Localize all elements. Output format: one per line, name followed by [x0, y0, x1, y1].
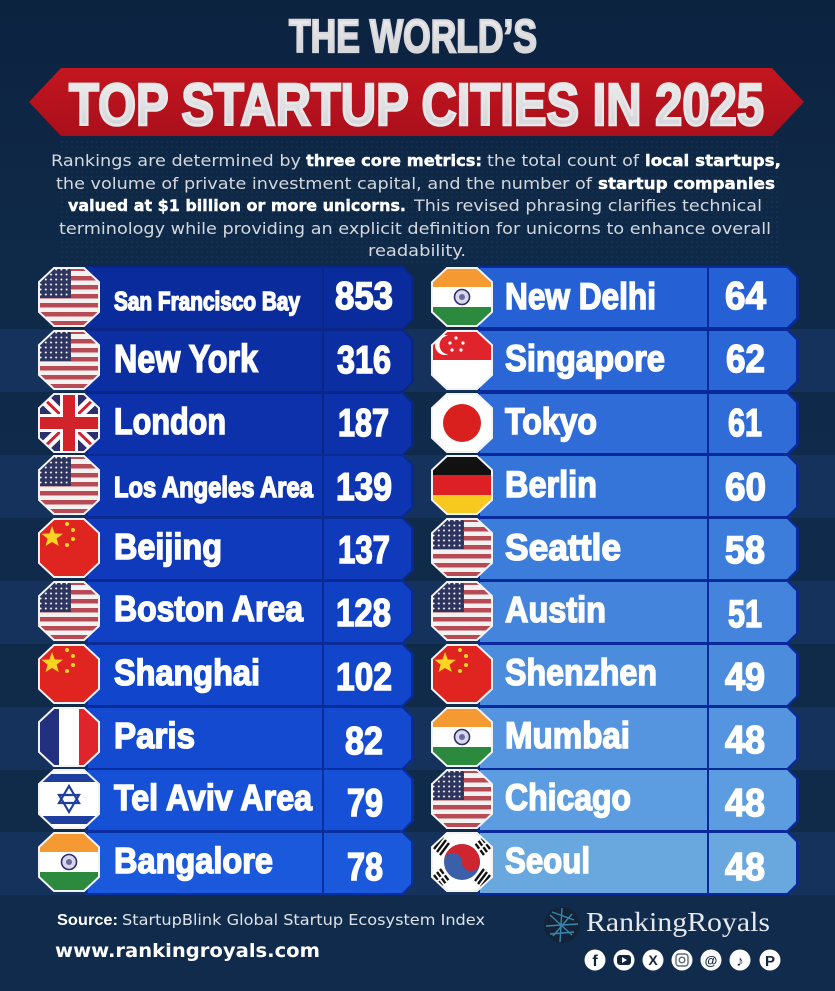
intro paragraph: valued at $1 billion or more unicorns.: [68, 196, 406, 215]
row: Singapore 62: 62: [726, 338, 765, 381]
row: London 187: London: [114, 401, 226, 442]
row: New York 316: New York: [114, 338, 258, 381]
row: San Francisco Bay 853: [38, 266, 414, 330]
row: Chicago 48: Chicago: [505, 777, 631, 818]
row: Mumbai 48: Mumbai: [505, 715, 630, 756]
intro paragraph: the volume of private investment capital, and the number of: [56, 174, 592, 193]
row: Berlin 60: [431, 454, 799, 518]
row: Mumbai 48: [431, 706, 799, 770]
row: Seattle 58: Seattle: [505, 527, 621, 568]
social icons: f: [592, 953, 598, 970]
row: Seoul 48: [431, 831, 799, 895]
row: Seattle 58: 58: [725, 529, 765, 572]
row: Shenzhen 49: [431, 643, 799, 707]
row: Shenzhen 49: 49: [725, 656, 765, 699]
row: New Delhi 64: New Delhi: [505, 276, 656, 317]
row: New York 316: [38, 329, 414, 393]
social icons: X: [648, 952, 658, 968]
row: Boston Area 128: 128: [336, 592, 391, 635]
website url: www.rankingroyals.com: [55, 940, 320, 962]
brand name: RankingRoyals: [586, 907, 770, 937]
row: New Delhi 64: [431, 266, 799, 330]
source line: StartupBlink Global Startup Ecosystem Index: [122, 911, 485, 929]
row: Austin 51: Austin: [505, 589, 606, 630]
row: Singapore 62: Singapore: [505, 338, 665, 379]
row: Los Angeles Area 139: [38, 454, 414, 518]
row: Shanghai 102: [38, 643, 414, 707]
title: the world's: THE WORLD’S: [289, 10, 537, 62]
row: Chicago 48: 48: [725, 782, 765, 825]
row: Shanghai 102: Shanghai: [114, 652, 260, 693]
row: London 187: 187: [338, 402, 389, 445]
row: San Francisco Bay 853: 853: [335, 275, 393, 318]
social icons: P: [765, 953, 775, 970]
row: Los Angeles Area 139: 139: [336, 466, 392, 509]
row: Shenzhen 49: Shenzhen: [505, 652, 657, 693]
row: Chicago 48: [431, 768, 799, 832]
intro paragraph: terminology while providing an explicit definition for unicorns to enhance overall: [59, 219, 771, 238]
row: Austin 51: 51: [728, 593, 762, 636]
row: Boston Area 128: Boston Area: [114, 588, 304, 629]
intro paragraph: the total count of: [487, 151, 639, 170]
row: Bangalore 78: [38, 831, 414, 895]
row: Beijing 137: Beijing: [114, 526, 222, 567]
icon: RankingRoyals logo: [544, 907, 580, 943]
row: Beijing 137: [38, 517, 414, 581]
row: Paris 82: Paris: [114, 715, 195, 756]
row: London 187: [38, 392, 414, 456]
row: Tokyo 61: 61: [728, 402, 762, 445]
row: Tel Aviv Area 79: [38, 768, 414, 832]
row: Los Angeles Area 139: Los Angeles Area: [114, 472, 314, 504]
row: New Delhi 64: 64: [725, 275, 766, 318]
intro paragraph: This revised phrasing clarifies technical: [413, 196, 762, 215]
row: Bangalore 78: Bangalore: [114, 840, 273, 881]
social icons: @: [705, 953, 717, 968]
row: Seoul 48: Seoul: [505, 840, 590, 881]
row: Boston Area 128: [38, 580, 414, 644]
row: Beijing 137: 137: [338, 529, 390, 572]
row: Seoul 48: 48: [725, 846, 765, 889]
social icons: ♪: [736, 953, 744, 970]
row: Seattle 58: [431, 517, 799, 581]
social icons: [584, 950, 780, 970]
row: Austin 51: [431, 580, 799, 644]
row: Tel Aviv Area 79: 79: [347, 782, 383, 825]
row: Shanghai 102: 102: [336, 656, 392, 699]
row: New York 316: 316: [337, 339, 391, 382]
intro paragraph: [51, 151, 781, 260]
intro paragraph: Rankings are determined by: [51, 151, 301, 170]
source line: Source:: [57, 912, 118, 929]
intro paragraph: startup companies: [598, 174, 775, 193]
intro paragraph: local startups,: [645, 151, 781, 170]
row: Tokyo 61: [431, 392, 799, 456]
row: Bangalore 78: 78: [347, 846, 383, 889]
row: Mumbai 48: 48: [725, 719, 765, 762]
row: Paris 82: [38, 706, 414, 770]
row: Paris 82: 82: [345, 720, 383, 763]
intro paragraph: three core metrics:: [306, 151, 482, 170]
row: Berlin 60: 60: [725, 466, 766, 509]
row: Berlin 60: Berlin: [505, 464, 597, 505]
intro paragraph: readability.: [368, 241, 466, 260]
row: Tel Aviv Area 79: Tel Aviv Area: [114, 777, 313, 818]
row: Tokyo 61: Tokyo: [505, 401, 597, 442]
row: San Francisco Bay 853: San Francisco Bay: [114, 286, 300, 316]
row: Singapore 62: [431, 329, 799, 393]
